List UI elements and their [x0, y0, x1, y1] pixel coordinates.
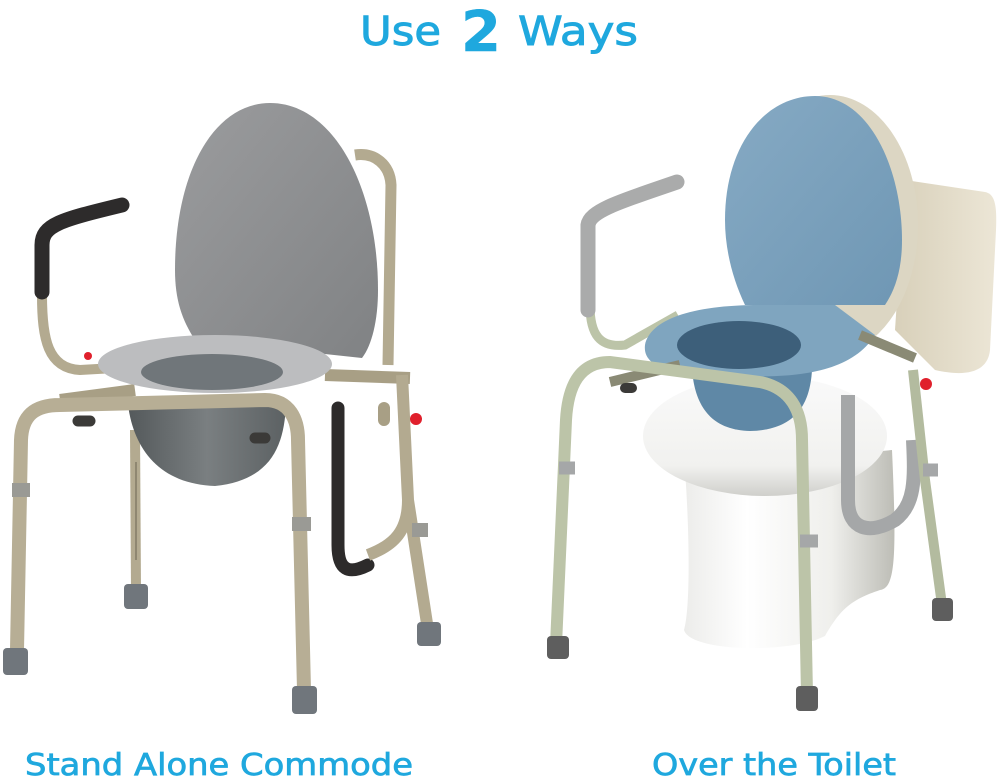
dark latch pins [625, 383, 632, 393]
left armrest [588, 182, 678, 345]
rear left leg [135, 430, 136, 590]
raised grey lid [175, 103, 378, 358]
tan toilet lid edge [742, 95, 918, 355]
leg bands [12, 490, 428, 530]
caption: over the toilet: Over the Toilet [652, 748, 896, 783]
over the toilet chair [547, 95, 996, 711]
bucket [692, 370, 812, 431]
title: Ways [518, 9, 638, 55]
bucket [128, 405, 286, 486]
dark latch pins [78, 408, 384, 438]
title [360, 0, 638, 65]
left armrest [42, 205, 122, 370]
right rear leg [368, 375, 428, 630]
title: 2 [461, 0, 501, 65]
seat opening [677, 321, 801, 369]
front frame and legs [17, 400, 304, 690]
caption: stand alone commode: Stand Alone Commode [25, 748, 413, 783]
red release buttons [84, 352, 422, 425]
front frame and legs [556, 362, 807, 695]
leg bands [559, 468, 938, 541]
red release button [920, 378, 932, 390]
right rear arm support [355, 155, 391, 365]
toilet bowl [643, 376, 887, 496]
title: Use [360, 9, 441, 55]
rubber feet [547, 598, 953, 711]
seat [645, 305, 875, 376]
folded arm [848, 370, 942, 605]
seat opening [141, 354, 283, 390]
rubber feet [3, 584, 441, 714]
toilet base [684, 450, 894, 648]
rear rail [610, 335, 915, 382]
stand alone commode chair [3, 103, 441, 714]
rear frame rail [60, 375, 410, 400]
seat [98, 335, 332, 393]
blue lid [725, 96, 902, 305]
black handle of folded armrest [338, 408, 368, 570]
toilet tank [895, 180, 996, 373]
